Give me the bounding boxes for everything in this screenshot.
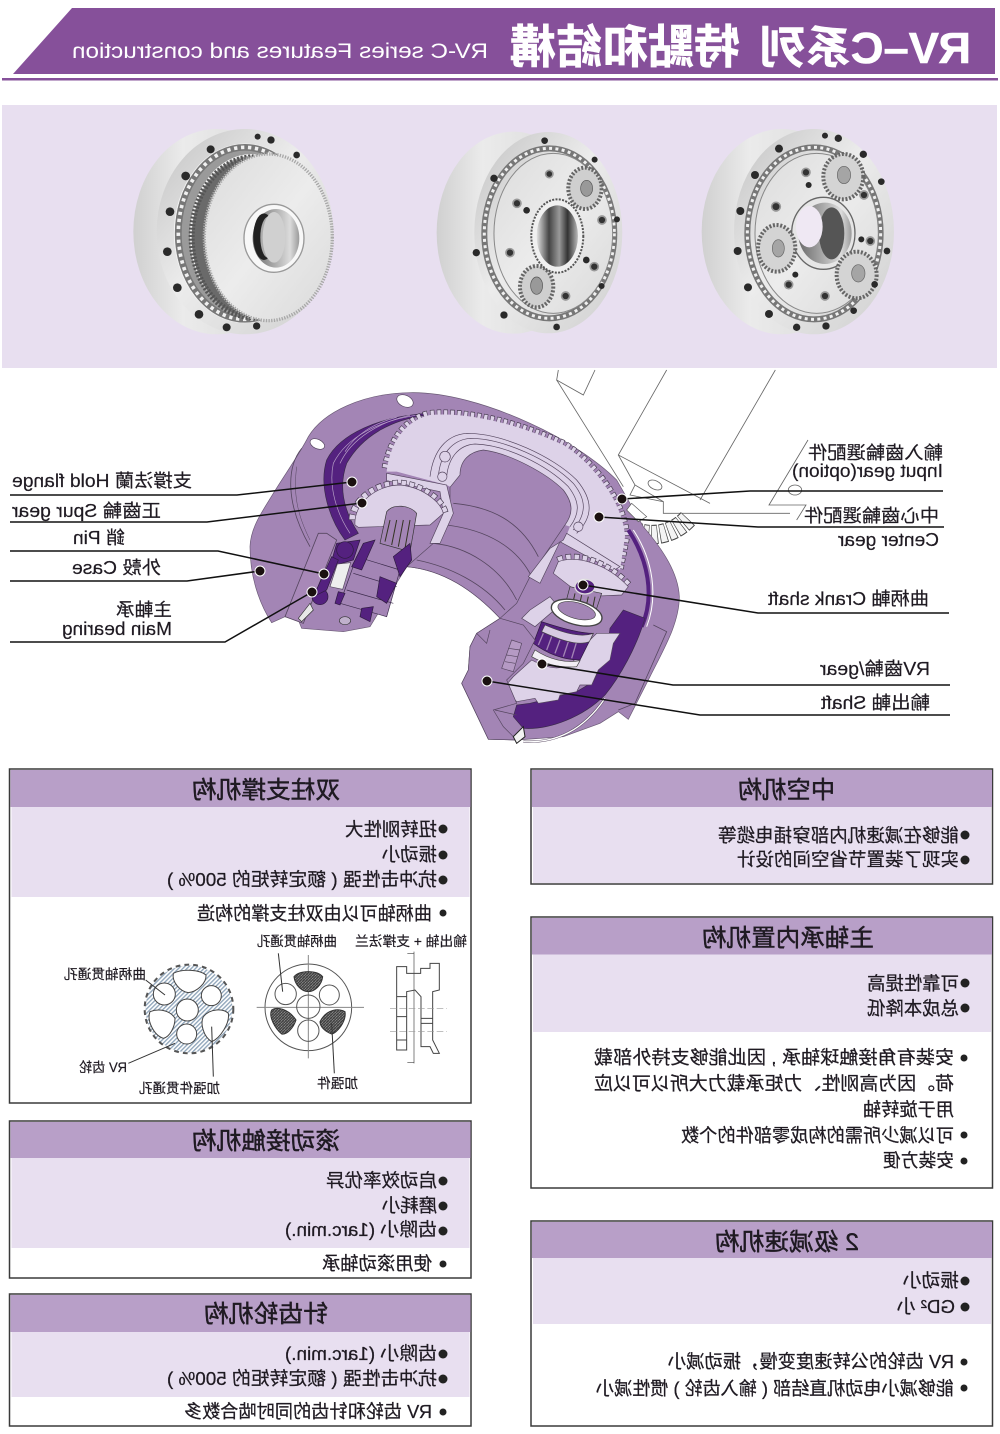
leader: spur gear: 正齒輪 Spur gear <box>12 501 161 521</box>
bullet list: 齿隙小 (1arc.min.) <box>285 1219 437 1240</box>
photo: reducer with large gear <box>133 129 333 334</box>
panel: two-stage reduction <box>531 1221 992 1426</box>
panel: hollow structure <box>531 769 992 884</box>
panel: double-column support <box>10 769 471 1103</box>
panel: rolling contact <box>10 1121 471 1278</box>
bullet list <box>596 1270 970 1399</box>
bullet list: 磨耗小 <box>382 1195 437 1216</box>
photo: reducer with two planet gears <box>437 132 622 334</box>
panel: built-in main bearing <box>531 917 992 1188</box>
right carrier step <box>522 597 558 627</box>
photo background <box>2 105 997 368</box>
bullet list: 安装有角接触球轴承 , 因此能够支持外部载 <box>594 1047 954 1068</box>
heading: 针齿轮机构 <box>204 1301 328 1328</box>
panel highlight <box>12 807 470 897</box>
leader: center gear: 中心齒輪選配件 <box>804 506 939 526</box>
right spur gear <box>553 559 628 597</box>
leader: crank shaft <box>578 580 949 613</box>
diagram: shaft cross-section <box>390 952 447 1063</box>
bullet list: 能够减小电动机直结部 ( 输入齿轮 ) 惯性减小 <box>596 1378 954 1399</box>
bearing balls <box>438 451 583 531</box>
bullet list: 曲柄轴可以由双柱支撑的构造 <box>197 903 432 924</box>
leader: shaft <box>482 676 950 715</box>
leader: center gear <box>594 506 944 550</box>
leader lines and labels <box>10 443 950 715</box>
bore contour lines <box>417 503 538 610</box>
bullet list <box>167 1343 448 1422</box>
left crank shaft <box>298 506 417 625</box>
bullet list: 齿隙小 (1arc.min.) <box>285 1343 437 1364</box>
small diagram labels: 曲柄轴贯通孔 <box>257 934 337 949</box>
panel frame <box>531 1221 992 1426</box>
leader: center gear: Center gear <box>838 530 939 550</box>
bore <box>407 450 571 618</box>
photo: reducer with three planet gears <box>702 129 894 334</box>
panel header <box>532 1222 992 1258</box>
bullet list: 用于旋转轴 <box>863 1099 954 1120</box>
right spur gear teeth outline <box>558 559 628 587</box>
bearing race lines <box>430 433 589 533</box>
right spur gear teeth fill <box>558 559 628 587</box>
lower seal <box>513 727 525 743</box>
leader: case: 外殼 Case <box>72 558 161 578</box>
lower seal arc <box>523 698 605 742</box>
panel highlight <box>12 1332 470 1397</box>
bullet list: RV 齿轮和针齿的同时啮合数多 <box>184 1401 432 1422</box>
bullet list: 振动小 <box>382 844 437 865</box>
panel frame <box>531 917 992 1188</box>
panel highlight <box>533 1258 991 1324</box>
banner band <box>13 8 995 74</box>
English subtitle: RV-C series Features and construction <box>72 40 488 63</box>
output shaft block <box>462 618 535 740</box>
center gear dark meshing <box>627 503 647 522</box>
bullet list: 启动效率优异 <box>326 1170 437 1191</box>
right carrier wall <box>528 533 620 583</box>
bullet list: GD² 小 <box>897 1296 955 1317</box>
lower dark bearing band <box>513 610 645 728</box>
heading: 中空机构 <box>738 777 835 804</box>
panel header <box>10 1122 470 1158</box>
lower light stepped gear <box>503 633 620 703</box>
output shaft screw <box>477 630 522 715</box>
bullet list: 可以减少所需的构成零部件的个数 <box>681 1125 954 1146</box>
header rule <box>2 78 998 80</box>
panel header <box>10 1295 470 1332</box>
case body <box>250 393 679 740</box>
bullet list: 扭转刚性大 <box>345 819 437 840</box>
panel header <box>532 918 992 954</box>
panel: pin gear <box>10 1294 471 1426</box>
input gear outline block <box>557 370 808 520</box>
panel highlight <box>533 954 991 1032</box>
heading: 双柱支撑机构 <box>192 777 340 804</box>
panel highlight <box>12 1158 470 1248</box>
bullet list: 安装方便 <box>883 1150 954 1171</box>
bullet list: 实现了装置节省空间的设计 <box>737 849 959 870</box>
left spur gear <box>355 485 443 527</box>
bullet list: 可靠性提高 <box>867 973 959 994</box>
bullet list: RV 齿轮的公转速度变慢，振动减小 <box>668 1351 954 1372</box>
leader: main bearing <box>10 587 317 642</box>
leader: pin: 銷 Pin <box>73 528 125 548</box>
leader: input gear <box>617 443 943 504</box>
bullet list: 总成本降低 <box>867 998 959 1019</box>
right crank shaft <box>532 579 605 667</box>
lower seal arc highlight <box>523 698 605 742</box>
title: features and construction: 特點和結構 <box>510 21 740 73</box>
panel header <box>532 770 992 807</box>
leader: case <box>10 558 265 581</box>
leader: main bearing: Main bearing <box>62 619 172 639</box>
bullet list <box>285 1170 448 1274</box>
diagram: RV gear section <box>128 966 232 1077</box>
leader: RV gear <box>537 659 950 685</box>
bullet list <box>718 825 970 870</box>
leader: shaft: 輸出軸 Shaft <box>821 693 930 713</box>
bullet list <box>594 973 970 1171</box>
bullet list: 使用滚动轴承 <box>322 1253 432 1274</box>
panel highlight <box>533 807 991 883</box>
small diagram labels <box>63 934 467 1096</box>
diagram: carrier section <box>257 953 364 1073</box>
leader: RV gear: RV齒輪/gear <box>820 659 930 679</box>
bullet list <box>167 819 448 924</box>
leader: main bearing: 主軸承 <box>116 600 172 620</box>
heading: 2 级减速机构 <box>715 1229 859 1256</box>
heading: 主轴承内置机构 <box>702 925 874 952</box>
leader: input gear: 輸入齒輪選配件 <box>808 443 943 463</box>
input gear teeth fill <box>627 518 688 535</box>
panel frame <box>531 769 992 884</box>
panel frame <box>10 1121 471 1278</box>
panel header <box>10 770 470 807</box>
leader: hold flange: 支撐法蘭 Hold flange <box>12 471 192 491</box>
bullet list: 抗冲击性强 ( 额定转矩的 500% ) <box>167 869 437 890</box>
panel frame <box>10 769 471 1103</box>
small diagram labels: 曲柄轴贯通孔 <box>63 967 146 982</box>
small diagram labels: 输出轴 + 支撑法兰 <box>355 934 467 949</box>
panel: product photos <box>2 105 997 368</box>
case contour lines <box>285 448 667 710</box>
left carrier wall <box>387 473 453 543</box>
bullet list: 振动小 <box>903 1270 959 1291</box>
input gear teeth <box>627 518 688 535</box>
left spur gear teeth fill <box>354 485 443 520</box>
large ring gear teeth fill <box>387 414 625 570</box>
left dark bearing ring <box>324 413 427 540</box>
right thin ring <box>628 530 649 627</box>
ring highlight lines <box>332 415 420 533</box>
leader: pin <box>10 528 329 579</box>
bullet list: 抗冲击性强 ( 额定转矩的 500% ) <box>167 1368 437 1389</box>
leader: input gear: Input gear(option) <box>792 461 943 481</box>
left spur gear teeth outline <box>354 485 443 520</box>
right white ring edge <box>633 530 653 627</box>
heading: 滚动接触机构 <box>192 1128 340 1155</box>
large ring gear <box>387 414 625 570</box>
bullet list: 荷。因为高刚性、力矩承载力大所以可以应 <box>594 1073 954 1094</box>
small diagram labels: 加强件贯通孔 <box>139 1081 220 1096</box>
flange bolt holes <box>308 392 415 451</box>
large ring gear teeth outline <box>387 414 625 570</box>
small diagram labels: RV 齿轮 <box>79 1060 127 1075</box>
leader: crank shaft: 曲柄軸 Crank shaft <box>768 589 929 609</box>
bullet list: 能够在减速机内部穿插电缆等 <box>718 825 959 846</box>
exploded cutaway diagram <box>250 370 808 743</box>
title: RV-C series: RV–C系列 <box>760 24 971 73</box>
small diagram labels: 加强件 <box>317 1076 358 1091</box>
leader: hold flange <box>10 471 357 495</box>
leader: spur gear <box>10 498 367 522</box>
panel frame <box>10 1294 471 1426</box>
header banner <box>2 8 998 80</box>
